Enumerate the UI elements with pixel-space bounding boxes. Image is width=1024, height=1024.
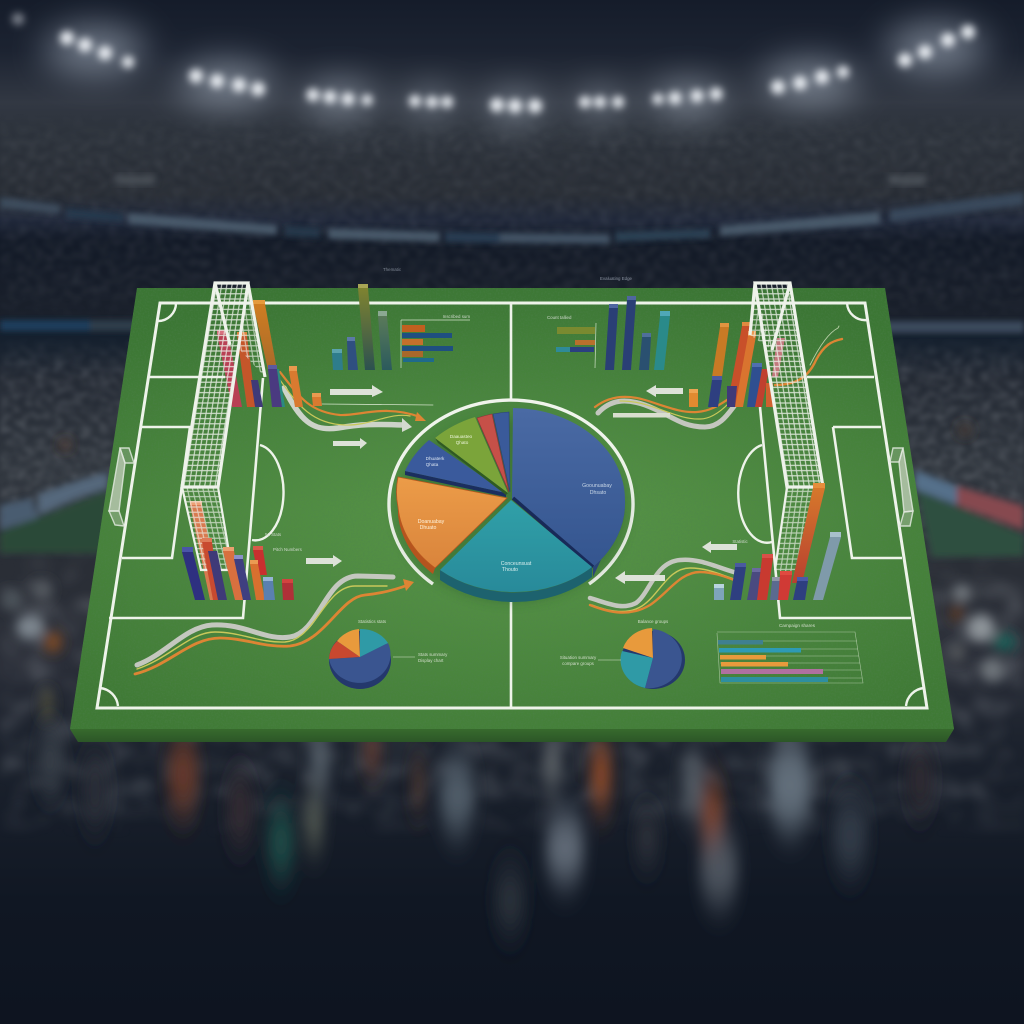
- slice: orange: [396, 477, 507, 574]
- pie shadow: [396, 418, 628, 602]
- bars: left goal lower group (behind net): [190, 501, 220, 600]
- bars: left goal upper group: [217, 300, 322, 407]
- bars: upper middle right: [556, 296, 670, 370]
- small pie chart: right: [560, 619, 685, 689]
- small pie chart: left: [329, 619, 448, 689]
- left pitch edge and board: [0, 472, 108, 553]
- slice: red: [477, 414, 509, 492]
- blurred side spectators: [2, 424, 1016, 723]
- horizontal mini chart: [556, 323, 596, 368]
- connector and labels: compare groups: [562, 661, 595, 666]
- arrow: [646, 385, 683, 397]
- small captions: Inscribed sum: [443, 314, 470, 319]
- bars: right goal lower group: [714, 483, 841, 600]
- slice: green: [435, 417, 508, 495]
- upper crowd texture: [8, 138, 1016, 297]
- small captions: Pitch Numbers: [273, 547, 303, 552]
- horizontal bar chart: lower right: Campaign shares: [779, 623, 816, 628]
- flow: lower left: [135, 555, 414, 674]
- slice: teal: [440, 500, 592, 602]
- flow: lower right: [590, 541, 740, 613]
- right pitch edge and board: [915, 470, 1024, 557]
- connector and labels: Situation summary: [560, 655, 597, 660]
- slice: green: Qhato: [456, 440, 469, 445]
- slice: large blue: Dhsato: [590, 490, 606, 496]
- connector and labels: Balance groups: [638, 619, 669, 624]
- small captions: Statistic: [732, 539, 748, 544]
- arrow: [615, 571, 665, 584]
- pitch front edge: [70, 729, 954, 742]
- slice: small blue: [405, 440, 506, 497]
- centre circle arc: [389, 400, 633, 584]
- slice: green: Daauasteo: [450, 434, 473, 439]
- small captions: [265, 267, 748, 552]
- connector and labels: [358, 619, 448, 663]
- floodlight lamps: [12, 13, 975, 113]
- slice: small blue: Qhata: [426, 462, 439, 467]
- pitch surface: [70, 288, 954, 729]
- pitch board: [60, 280, 960, 742]
- connector and labels: [560, 619, 669, 666]
- slice: orange: Doanuabay: [418, 519, 445, 525]
- upper tier advertising strip: [0, 192, 1024, 244]
- slice: small blue: Dhuaterk: [426, 456, 445, 461]
- small captions: Count tallied: [547, 315, 572, 320]
- small captions: 52 Stats: [265, 532, 282, 537]
- chart grid: [717, 632, 863, 683]
- arrow: [330, 385, 383, 397]
- pitch markings: [97, 303, 927, 708]
- slice: narrow blue: [493, 412, 510, 492]
- connector and labels: Statistics stats: [358, 619, 387, 624]
- mid crowd texture: [0, 348, 1024, 527]
- bars: left goal lower group: [182, 538, 294, 600]
- arrow: [702, 541, 737, 553]
- connector and labels: Display chart: [418, 658, 444, 663]
- pitch lighting: [70, 288, 954, 729]
- connector and labels: Stats summary: [418, 652, 448, 657]
- arrow: [306, 555, 342, 567]
- central pie chart: [389, 400, 633, 602]
- flow behind right net: [775, 339, 842, 385]
- blurred front-row spectators: [38, 732, 934, 930]
- bars: right goal upper group: [689, 322, 785, 407]
- floodlight halo: [45, 24, 986, 124]
- crowd banner patches: [115, 175, 926, 185]
- lower crowd texture: [0, 580, 1024, 824]
- left outer goal: [109, 448, 134, 526]
- flow: upper left: [280, 372, 433, 449]
- slice: large blue: Goounuabay: [582, 483, 612, 489]
- slice: teal: Thouto: [502, 567, 518, 573]
- small captions: Evaluating Edge: [600, 276, 633, 281]
- goal net: left: [182, 283, 265, 570]
- grass grain: [60, 280, 960, 735]
- small captions: Thematic: [383, 267, 402, 272]
- net frame: [750, 283, 823, 487]
- arrow: [333, 438, 367, 449]
- bars: upper middle left: [332, 284, 470, 370]
- goal net: right: [750, 283, 823, 575]
- slice: large blue: [512, 408, 625, 577]
- horizontal bar chart: lower right: [717, 623, 863, 683]
- flow: upper right: [595, 326, 842, 427]
- slice: teal: Conceunsuat: [501, 561, 532, 567]
- mid tier blue strips: [0, 320, 1024, 333]
- slice: orange: Dhuato: [420, 525, 436, 531]
- right outer goal: [890, 448, 913, 526]
- flow ribbons and arrows: [135, 326, 842, 674]
- horizontal mini chart: [401, 320, 470, 368]
- stadium floodlights: [12, 13, 986, 124]
- net frame: [182, 283, 265, 487]
